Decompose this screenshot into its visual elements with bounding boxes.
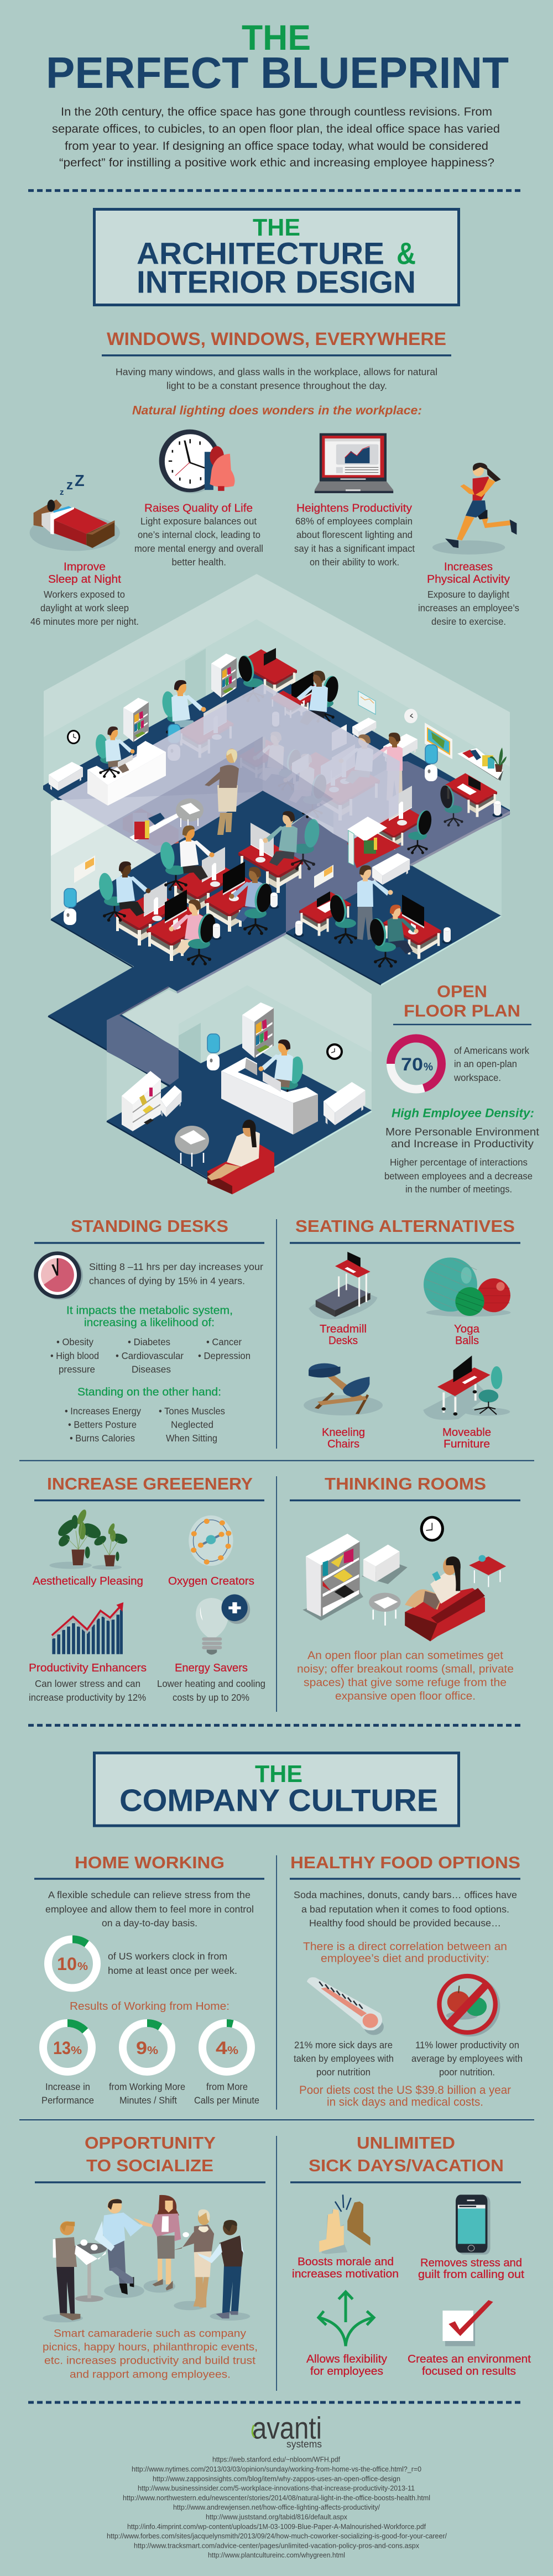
label: removes stress: Removes stress and bbox=[420, 2257, 522, 2269]
sources list: http://www.plantcultureinc.com/whygreen.html bbox=[208, 2552, 345, 2559]
subheading: diet and productivity: There is a direct correlation between an bbox=[303, 1941, 507, 1953]
icon: sleeping in bed: z bbox=[66, 478, 73, 493]
stat: sick days: 21% more sick days are bbox=[294, 2039, 393, 2050]
donut chart: 4 percent: 4 bbox=[216, 2038, 227, 2058]
clock bbox=[67, 730, 80, 744]
sources list: http://www.andrewjensen.net/how-office-lighting-affects-productivity/ bbox=[173, 2504, 380, 2511]
heading: home working: HOME WORKING bbox=[75, 1853, 225, 1872]
sitting statistic: chances of dying by 15% in 4 years. bbox=[89, 1276, 245, 1287]
donut chart: 10 percent: 10 bbox=[57, 1954, 77, 1974]
icon: branching arrows bbox=[319, 2292, 374, 2346]
label: moveable furniture: Moveable bbox=[442, 1427, 491, 1439]
heading: increase greenery: INCREASE GREEENERY bbox=[47, 1474, 253, 1493]
donut chart: 9 percent: Minutes / Shift bbox=[119, 2094, 177, 2105]
benefit: improve sleep: Workers exposed to bbox=[44, 589, 125, 600]
wall map bbox=[425, 723, 452, 759]
intro text: “perfect” for instilling a positive work ethic and increasing employee happiness? bbox=[59, 156, 494, 169]
wall chart bbox=[358, 691, 375, 714]
food intro text: a bad reputation when it comes to food options. bbox=[301, 1904, 509, 1915]
list: standing benefits: • Burns Calories bbox=[70, 1433, 135, 1444]
receptionist upper bbox=[94, 727, 134, 778]
logo: avanti systems: avanti bbox=[252, 2411, 322, 2446]
benefit: raises quality of life: one’s internal clock, leading to bbox=[138, 529, 260, 540]
stat: lower productivity: poor nutrition. bbox=[439, 2067, 495, 2078]
label and text: energy savers: costs by up to 20% bbox=[173, 1692, 249, 1703]
wall clock bbox=[404, 709, 418, 723]
list: standing benefits bbox=[65, 1405, 225, 1444]
label: yoga balls: Balls bbox=[455, 1335, 479, 1347]
label: boosts morale: increases motivation bbox=[292, 2268, 399, 2280]
calendar right bbox=[314, 865, 333, 888]
benefit: heightens productivity: say it has a significant impact bbox=[294, 543, 415, 554]
donut chart: 13 percent: 13 bbox=[53, 2038, 71, 2058]
label: removes stress: guilt from calling out bbox=[418, 2269, 524, 2281]
illustration: woman in breakout room bbox=[302, 1516, 506, 1642]
donut chart: 9 percent: % bbox=[147, 2045, 158, 2057]
windows intro text: Having many windows, and glass walls in the workplace, allows for natural bbox=[116, 366, 437, 377]
food intro text: Healthy food should be provided because… bbox=[309, 1917, 501, 1929]
section banner: architecture and interior design: ARCHITECTURE bbox=[137, 236, 384, 271]
label and text: energy savers: Lower heating and cooling bbox=[157, 1678, 265, 1689]
section banner: company culture: COMPANY CULTURE bbox=[119, 1783, 438, 1818]
icon: treadmill desk bbox=[309, 1252, 377, 1319]
receptionist bbox=[259, 1039, 305, 1105]
subheading: standing: Standing on the other hand: bbox=[77, 1386, 221, 1398]
socialize text: Smart camaraderie such as company bbox=[54, 2328, 247, 2340]
donut chart: 13 percent: Performance bbox=[41, 2094, 94, 2105]
density text: in the number of meetings. bbox=[405, 1183, 512, 1194]
reception room bbox=[122, 1002, 366, 1194]
windows intro text bbox=[116, 366, 437, 391]
round table with book bbox=[175, 1126, 209, 1167]
heading: standing desks: STANDING DESKS bbox=[71, 1216, 228, 1236]
seated man bbox=[293, 671, 340, 725]
red shelf with books bbox=[347, 817, 401, 868]
icon: potted plants bbox=[49, 1509, 131, 1570]
label: yoga balls bbox=[454, 1323, 480, 1347]
sofa with shelf bbox=[123, 808, 179, 846]
benefit: physical activity: Increases bbox=[444, 561, 493, 573]
label: allows flexibility: Allows flexibility bbox=[306, 2353, 387, 2365]
donut chart: 9 percent: 9 bbox=[136, 2038, 147, 2058]
density text: Higher percentage of interactions bbox=[390, 1157, 528, 1168]
reception desk upper bbox=[87, 741, 166, 806]
label: creates an environment: focused on results bbox=[422, 2365, 516, 2378]
benefit: improve sleep: Sleep at Night bbox=[48, 573, 121, 586]
front furniture and staff bbox=[64, 727, 452, 968]
title bbox=[46, 18, 509, 97]
label and text: productivity enhancers: Can lower stress and can bbox=[35, 1678, 140, 1689]
subheading: high employee density: High Employee Density: bbox=[392, 1106, 534, 1120]
sources list: http://www.nytimes.com/2013/03/03/opinion/sunday/working-from-home-vs-the-office.html?_r=0 bbox=[132, 2465, 421, 2473]
donut chart: 4 percent bbox=[194, 2023, 259, 2105]
density text: and Increase in Productivity bbox=[391, 1138, 534, 1150]
food intro text: Soda machines, donuts, candy bars… offices have bbox=[294, 1889, 517, 1900]
benefit: improve sleep: 46 minutes more per night. bbox=[30, 616, 139, 627]
stat text: 70 percent: in an open-plan bbox=[454, 1058, 517, 1069]
food intro text bbox=[294, 1889, 517, 1929]
panel: healthy food options bbox=[290, 1853, 523, 2109]
benefit: physical activity: desire to exercise. bbox=[431, 616, 506, 627]
icon: no healthy food bbox=[437, 1974, 500, 2036]
donut chart: 4 percent: % bbox=[227, 2045, 238, 2057]
title: PERFECT BLUEPRINT bbox=[46, 48, 509, 97]
callout: cost of poor diets bbox=[299, 2084, 511, 2109]
heading: healthy food options: HEALTHY FOOD OPTIONS bbox=[290, 1853, 520, 1872]
callout: cost of poor diets: in sick days and medical costs. bbox=[327, 2096, 483, 2109]
stat text: 10 percent: home at least once per week. bbox=[108, 1965, 237, 1976]
heading: open floor plan bbox=[404, 982, 520, 1021]
icon: laptop chart bbox=[315, 433, 393, 493]
heading: open floor plan: OPEN bbox=[437, 982, 487, 1001]
benefit: improve sleep: daylight at work sleep bbox=[40, 603, 129, 614]
subheading: diet and productivity bbox=[303, 1941, 507, 1965]
panel: seating alternatives bbox=[290, 1216, 520, 1450]
benefit: physical activity: Physical Activity bbox=[427, 573, 510, 586]
subheading: natural lighting: Natural lighting does wonders in the workplace: bbox=[132, 403, 422, 417]
label: oxygen creators: Oxygen Creators bbox=[168, 1575, 254, 1587]
density text: More Personable Environment bbox=[385, 1127, 540, 1138]
donut chart: 10 percent: % bbox=[77, 1961, 88, 1973]
donut chart: 9 percent bbox=[109, 2023, 185, 2105]
label: creates an environment: Creates an environment bbox=[408, 2353, 531, 2365]
stat: sick days: poor nutrition bbox=[316, 2067, 371, 2078]
seated woman white blouse bbox=[159, 825, 215, 891]
heading: seating alternatives: SEATING ALTERNATIVES bbox=[295, 1216, 515, 1236]
list: standing benefits: When Sitting bbox=[166, 1433, 217, 1444]
seated woman pink bbox=[169, 900, 217, 965]
label: boosts morale: Boosts morale and bbox=[298, 2256, 394, 2268]
callout: cost of poor diets: Poor diets cost the US $39.8 billion a year bbox=[299, 2084, 511, 2097]
donut chart: 9 percent: from Working More bbox=[109, 2081, 185, 2092]
subheading: metabolic system bbox=[66, 1305, 233, 1329]
label: removes stress bbox=[418, 2257, 524, 2281]
panel: windows, windows, everywhere bbox=[30, 329, 519, 627]
donut chart: 4 percent: from More bbox=[206, 2081, 248, 2092]
bookshelf left bbox=[122, 1071, 161, 1131]
home working text bbox=[45, 1889, 254, 1929]
subheading: diet and productivity: employee’s diet and productivity: bbox=[321, 1953, 489, 1965]
subheading: metabolic system: increasing a likelihood of: bbox=[84, 1317, 215, 1329]
heading: opportunity to socialize: TO SOCIALIZE bbox=[86, 2156, 213, 2175]
icon: checkmark bbox=[442, 2300, 493, 2346]
icon: sleeping in bed: Z bbox=[75, 472, 85, 490]
benefit: heightens productivity: Heightens Productivity bbox=[296, 503, 412, 515]
list: health risks: • Cardiovascular bbox=[116, 1350, 184, 1361]
benefit: raises quality of life: more mental energy and overall bbox=[134, 543, 263, 554]
label: kneeling chairs: Kneeling bbox=[322, 1427, 365, 1439]
sofa and seated woman bbox=[207, 1120, 274, 1194]
donut chart: 70 percent: % bbox=[424, 1061, 433, 1073]
socialize text: and rapport among employees. bbox=[70, 2369, 231, 2381]
panel: increase greenery bbox=[29, 1474, 265, 1703]
sources list: http://www.tracksmart.com/advice-center/pages/unlimited-vacation-policy-pros-and-cons.aspx bbox=[134, 2542, 420, 2549]
donut chart: 13 percent: Increase in bbox=[45, 2081, 90, 2092]
list: health risks: Diseases bbox=[132, 1364, 171, 1375]
intro text: In the 20th century, the office space has gone through countless revisions. From bbox=[61, 106, 492, 118]
blonde woman standing bbox=[205, 749, 239, 835]
label: creates an environment bbox=[408, 2353, 531, 2378]
donut chart: 13 percent: % bbox=[71, 2045, 82, 2057]
standing woman in pink bbox=[367, 733, 403, 801]
thinking rooms text bbox=[297, 1650, 514, 1702]
stat: sick days: taken by employees with bbox=[294, 2053, 394, 2064]
windows intro text: light to be a constant presence throughout the day. bbox=[166, 380, 387, 391]
thinking rooms text: An open floor plan can sometimes get bbox=[307, 1650, 503, 1662]
seated man blue bbox=[229, 867, 274, 935]
reception desk bbox=[221, 1057, 318, 1135]
icon: smartphone bbox=[456, 2194, 491, 2255]
intro text bbox=[52, 106, 500, 169]
panel: open floor plan bbox=[384, 982, 540, 1194]
icon: sleeping in bed: z bbox=[60, 488, 64, 497]
label: treadmill desks: Treadmill bbox=[320, 1323, 367, 1335]
benefit: physical activity: Exposure to daylight bbox=[427, 589, 509, 600]
label: moveable furniture bbox=[442, 1427, 491, 1450]
list: health risks: • Depression bbox=[198, 1350, 251, 1361]
logo: avanti systems: systems bbox=[286, 2439, 322, 2450]
heading: opportunity to socialize: OPPORTUNITY bbox=[85, 2133, 216, 2152]
label and text: productivity enhancers bbox=[29, 1662, 147, 1703]
clock bbox=[326, 1043, 343, 1060]
label: allows flexibility bbox=[306, 2353, 387, 2378]
heading: unlimited sick days bbox=[309, 2133, 504, 2175]
wall shelf with plant bbox=[457, 748, 507, 781]
heading: unlimited sick days: SICK DAYS/VACATION bbox=[309, 2156, 504, 2175]
benefit: heightens productivity: 68% of employees complain bbox=[295, 516, 413, 527]
illustration: five coworkers chatting bbox=[43, 2195, 250, 2322]
label: yoga balls: Yoga bbox=[454, 1323, 480, 1335]
benefit: physical activity: increases an employee’s bbox=[418, 603, 519, 614]
list: health risks: • Obesity bbox=[56, 1336, 93, 1347]
list: health risks: • High blood bbox=[50, 1350, 99, 1361]
label and text: energy savers bbox=[157, 1662, 265, 1703]
label and text: productivity enhancers: increase productivity by 12% bbox=[29, 1692, 146, 1703]
icon: yoga balls bbox=[424, 1257, 511, 1316]
icon: sitting clock bbox=[34, 1251, 83, 1300]
section banner: company culture: THE bbox=[255, 1760, 302, 1788]
sources list: http://www.forbes.com/sites/jacquelynsmith/2013/09/24/how-much-coworker-socializing-is-good-for-your-career/ bbox=[107, 2532, 447, 2540]
list: standing benefits: • Tones Muscles bbox=[159, 1405, 225, 1417]
list: standing benefits: • Betters Posture bbox=[68, 1419, 137, 1430]
donut chart: 70 percent: 70 bbox=[401, 1054, 423, 1074]
intro text: separate offices, to cubicles, to an open floor plan, the ideal office space has varied bbox=[52, 123, 500, 135]
chart: isometric open floor office bbox=[43, 574, 510, 1194]
books and coffee table upper bbox=[129, 798, 204, 842]
list: standing benefits: Neglected bbox=[171, 1419, 213, 1430]
benefit: heightens productivity: about florescent lighting and bbox=[296, 529, 413, 540]
stat text: 10 percent: of US workers clock in from bbox=[108, 1951, 227, 1962]
sitting statistic bbox=[89, 1261, 263, 1287]
label: moveable furniture: Furniture bbox=[444, 1438, 490, 1450]
icon: moveable furniture bbox=[423, 1356, 510, 1420]
socialize text bbox=[43, 2328, 258, 2381]
heading: open floor plan: FLOOR PLAN bbox=[404, 1001, 520, 1021]
label: boosts morale bbox=[292, 2256, 399, 2280]
icon: kneeling chair bbox=[304, 1363, 383, 1415]
label and text: productivity enhancers: Productivity Enhancers bbox=[29, 1662, 147, 1674]
label: kneeling chairs: Chairs bbox=[327, 1438, 359, 1450]
section banner: architecture and interior design: & bbox=[397, 236, 416, 271]
label: treadmill desks: Desks bbox=[328, 1335, 358, 1347]
stat: lower productivity: average by employees with bbox=[411, 2053, 523, 2064]
label: aesthetically pleasing: Aesthetically Pleasing bbox=[33, 1575, 143, 1587]
upper floor furniture and staff bbox=[49, 648, 507, 854]
seated man teal bbox=[263, 811, 321, 870]
socialize text: picnics, happy hours, philanthropic events, bbox=[43, 2342, 258, 2353]
panel: unlimited sick days and vacation bbox=[290, 2133, 531, 2378]
density text bbox=[384, 1127, 540, 1194]
sources list: http://www.businessinsider.com/5-workplace-innovations-that-increase-productivity-2013-11 bbox=[138, 2485, 415, 2493]
icon: oxygen molecule bbox=[189, 1516, 233, 1566]
list: health risks: pressure bbox=[59, 1364, 95, 1375]
stat text: 70 percent: workspace. bbox=[453, 1072, 501, 1083]
sources list: http://www.zapposinsights.com/blog/item/why-zappos-uses-an-open-office-design bbox=[153, 2475, 400, 2483]
density text: between employees and a decrease bbox=[384, 1171, 533, 1182]
office floors bbox=[43, 666, 510, 1193]
socialize text: etc. increases productivity and build trust bbox=[44, 2355, 256, 2367]
panel: thinking rooms bbox=[290, 1474, 520, 1702]
title: THE bbox=[242, 18, 311, 58]
seated man left bbox=[97, 861, 150, 922]
list: health risks: • Cancer bbox=[206, 1336, 242, 1347]
list: health risks: • Diabetes bbox=[128, 1336, 170, 1347]
glass wall overlay bbox=[58, 684, 400, 854]
seated woman red hair bbox=[368, 905, 419, 968]
stat text: 10 percent bbox=[108, 1951, 237, 1976]
icon: high five bbox=[319, 2194, 371, 2254]
home working text: on a day-to-day basis. bbox=[102, 1917, 197, 1929]
label and text: energy savers: Energy Savers bbox=[175, 1662, 248, 1674]
stat text: 70 percent bbox=[453, 1045, 529, 1083]
intro text: from year to year. If designing an office space today, what would be considered bbox=[65, 140, 488, 153]
panel: opportunity to socialize bbox=[35, 2133, 265, 2381]
home working text: A flexible schedule can relieve stress from the bbox=[48, 1889, 251, 1900]
stat: lower productivity bbox=[411, 2039, 523, 2078]
sources list: http://info.4imprint.com/wp-content/uploads/1M-03-1009-Blue-Paper-A-Malnourished-Workforce.pdf bbox=[127, 2523, 426, 2531]
label: allows flexibility: for employees bbox=[310, 2365, 383, 2378]
thinking rooms text: noisy; offer breakout rooms (small, private bbox=[297, 1663, 514, 1675]
heading: thinking rooms: THINKING ROOMS bbox=[325, 1474, 486, 1493]
heading: unlimited sick days: UNLIMITED bbox=[357, 2133, 455, 2152]
icon: sleeping in bed bbox=[30, 472, 120, 551]
benefit: heightens productivity bbox=[294, 503, 415, 567]
subheading: results: Results of Working from Home: bbox=[70, 2000, 229, 2013]
stat text: 70 percent: of Americans work bbox=[454, 1045, 529, 1056]
heading: windows: WINDOWS, WINDOWS, EVERYWHERE bbox=[107, 329, 446, 349]
icon: energy saving bulb bbox=[196, 1595, 250, 1655]
stat: sick days bbox=[294, 2039, 394, 2078]
sitting statistic: Sitting 8 –11 hrs per day increases your bbox=[89, 1261, 263, 1272]
sources list: https://web.stanford.edu/~nbloom/WFH.pdf bbox=[212, 2456, 340, 2464]
standing man bbox=[357, 865, 393, 940]
icon: productivity chart bbox=[52, 1602, 123, 1654]
benefit: improve sleep bbox=[30, 561, 139, 627]
benefit: raises quality of life: Light exposure balances out bbox=[140, 516, 257, 527]
donut chart: 13 percent bbox=[41, 2023, 94, 2105]
label: kneeling chairs bbox=[322, 1427, 365, 1450]
icon: runner bbox=[432, 463, 517, 555]
seated woman with cup bbox=[161, 680, 206, 738]
benefit: raises quality of life: better health. bbox=[171, 556, 226, 567]
sources list: http://www.northwestern.edu/newscenter/stories/2014/08/natural-light-in-the-office-boosts-health.html bbox=[123, 2494, 430, 2502]
heading: opportunity to socialize bbox=[85, 2133, 216, 2175]
panel: standing desks bbox=[34, 1216, 264, 1444]
benefit: physical activity bbox=[418, 561, 519, 627]
home working text: employee and allow them to feel more in control bbox=[45, 1904, 254, 1915]
icon: thermometer bbox=[307, 1977, 384, 2035]
sources list: http://www.juststand.org/tabid/816/default.aspx bbox=[206, 2514, 348, 2521]
subheading: metabolic system: It impacts the metabolic system, bbox=[66, 1305, 233, 1317]
section banner: company culture bbox=[94, 1753, 459, 1826]
benefit: raises quality of life bbox=[134, 503, 263, 567]
donut chart: 10 percent bbox=[48, 1939, 97, 1988]
benefit: improve sleep: Improve bbox=[64, 561, 106, 573]
icon: clock and heart bbox=[159, 430, 235, 493]
sources list bbox=[107, 2456, 447, 2559]
label: treadmill desks bbox=[320, 1323, 367, 1347]
office walls bbox=[44, 574, 510, 1121]
panel: home working bbox=[34, 1853, 264, 2105]
section banner: architecture and interior design bbox=[94, 209, 459, 305]
donut chart: 4 percent: Calls per Minute bbox=[194, 2094, 259, 2105]
section banner: architecture and interior design: THE bbox=[253, 214, 300, 241]
benefit: heightens productivity: on their ability to work. bbox=[310, 556, 399, 567]
list: standing benefits: • Increases Energy bbox=[65, 1405, 141, 1417]
stat: lower productivity: 11% lower productivity on bbox=[415, 2039, 519, 2050]
calendar left bbox=[74, 855, 95, 883]
thinking rooms text: spaces) that give some refuge from the bbox=[304, 1677, 507, 1689]
donut chart: 70 percent bbox=[390, 1038, 441, 1089]
thinking rooms text: expansive open floor office. bbox=[335, 1690, 476, 1702]
section banner: architecture and interior design: INTERIOR DESIGN bbox=[137, 264, 416, 300]
list: health risks bbox=[50, 1336, 251, 1375]
benefit: raises quality of life: Raises Quality of Life bbox=[144, 503, 253, 515]
